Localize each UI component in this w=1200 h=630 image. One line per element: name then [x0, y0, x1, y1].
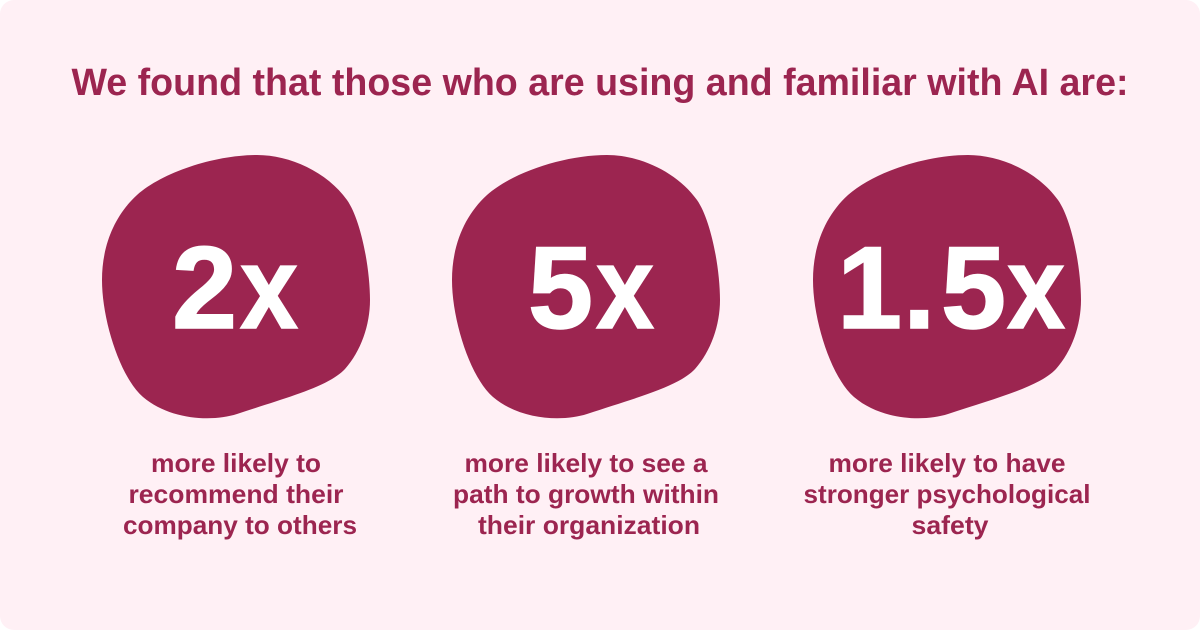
number: 2x: 2	[172, 222, 237, 353]
caption: 2x: company to others	[123, 510, 357, 540]
caption: 5x	[453, 448, 719, 540]
panel: 2x statistic	[102, 155, 370, 540]
number: 5x: 5	[528, 222, 593, 353]
number: 5x	[528, 222, 654, 353]
number: 2x	[172, 222, 298, 353]
number: 1.5x: 1.5	[837, 222, 1006, 353]
blob: 1.5x	[813, 155, 1081, 418]
caption: 2x: more likely to	[151, 448, 321, 478]
blob: 2x	[102, 155, 370, 418]
caption: 5x: path to growth within	[453, 479, 719, 509]
caption: 1.5x: safety	[912, 510, 989, 540]
caption: 5x: more likely to see a	[464, 448, 708, 478]
caption: 1.5x	[804, 448, 1090, 540]
blob: 5x	[452, 155, 720, 418]
caption: 1.5x: more likely to have	[828, 448, 1066, 478]
number: 2x: x	[240, 222, 298, 353]
number: 1.5x: x	[1007, 222, 1065, 353]
caption: 2x	[123, 448, 357, 540]
caption: 1.5x: stronger psychological	[804, 479, 1090, 509]
panel: 1.5x statistic	[804, 155, 1090, 540]
caption: 5x: their organization	[478, 510, 700, 540]
number: 5x: x	[596, 222, 654, 353]
caption: 2x: recommend their	[128, 479, 344, 509]
title: We found that those who are using and familiar with AI are:	[72, 62, 1128, 104]
panel: 5x statistic	[452, 155, 720, 540]
